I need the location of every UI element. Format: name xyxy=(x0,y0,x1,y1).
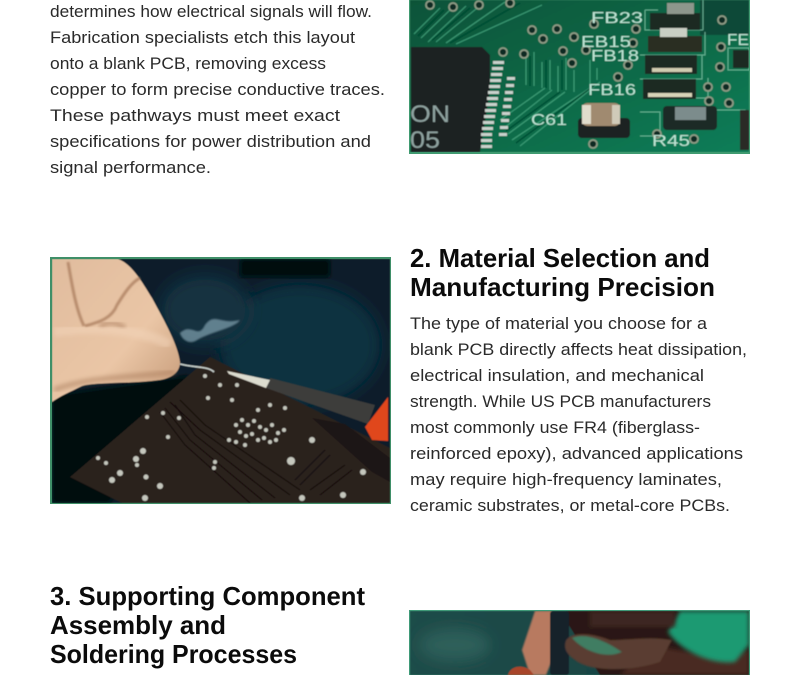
image: fingers holding a tool under green light xyxy=(409,610,750,675)
index finger xyxy=(522,611,556,675)
soldering iron xyxy=(266,378,375,424)
text block: step 2 description: strength. While US PCB manufacturers xyxy=(410,392,711,411)
solder wire xyxy=(180,364,214,372)
text block: step 2 description: most commonly use FR4 (fiberglass- xyxy=(410,418,700,437)
hand xyxy=(52,259,180,402)
text block: step 2 description: The type of material you choose for a xyxy=(410,314,708,333)
back of hand xyxy=(560,611,749,675)
text block: step 2 description: may require high-frequency laminates, xyxy=(410,470,722,489)
text block: step 1 description: determines how electrical signals will flow. xyxy=(50,2,372,21)
chip xyxy=(411,47,490,152)
heading: step 3: Soldering Processes xyxy=(50,639,297,669)
image: green circuit board close-up xyxy=(409,0,750,154)
text block: step 2 description: ceramic substrates, or metal-core PCBs. xyxy=(410,496,730,515)
text block: step 1 description: These pathways must meet exact xyxy=(50,106,340,125)
text block: step 1 description: copper to form precise conductive traces. xyxy=(50,80,385,99)
text block: step 2 description: reinforced epoxy), advanced applications xyxy=(410,444,743,463)
board silkscreen labels: FB16 xyxy=(588,82,636,99)
text block: step 2 description: electrical insulation, and mechanical xyxy=(410,366,704,385)
shadow xyxy=(52,375,190,503)
text block: step 2 description: blank PCB directly affects heat dissipation, xyxy=(410,340,747,359)
text block: step 2 description xyxy=(410,314,747,515)
text block: step 1 description xyxy=(50,2,385,177)
smoke xyxy=(180,319,240,342)
solder pads xyxy=(96,374,366,501)
image: hand soldering a dark circuit board xyxy=(50,257,391,504)
board silkscreen labels: C61 xyxy=(531,112,567,129)
text block: step 1 description: signal performance. xyxy=(50,158,211,177)
dark pcb xyxy=(70,357,390,503)
vias xyxy=(426,0,733,148)
board silkscreen labels: FB23 xyxy=(591,10,643,27)
text block: step 1 description: specifications for power distribution and xyxy=(50,132,371,151)
heading: step 2: Manufacturing Precision xyxy=(410,272,715,302)
board silkscreen labels: ON xyxy=(410,101,450,128)
pins xyxy=(481,61,515,148)
tool xyxy=(550,611,569,675)
board silkscreen labels: FB18 xyxy=(591,48,639,65)
thumb xyxy=(565,634,672,669)
heading: step 2 xyxy=(410,243,715,302)
board silkscreen labels xyxy=(410,10,749,154)
trace bundles xyxy=(414,2,600,146)
heading: step 3: 3. Supporting Component xyxy=(50,581,365,611)
heading: step 2: 2. Material Selection and xyxy=(410,243,710,273)
heading: step 3: Assembly and xyxy=(50,610,226,640)
components xyxy=(578,3,749,150)
board silkscreen labels: 05 xyxy=(410,127,440,154)
heading: step 3 xyxy=(50,581,365,669)
board silkscreen labels: R45 xyxy=(652,133,690,150)
text block: step 1 description: Fabrication specialists etch this layout xyxy=(50,28,355,47)
text block: step 1 description: onto a blank PCB, removing excess xyxy=(50,54,326,73)
board silkscreen labels: EB15 xyxy=(581,34,631,51)
board silkscreen labels: FE xyxy=(727,32,749,49)
